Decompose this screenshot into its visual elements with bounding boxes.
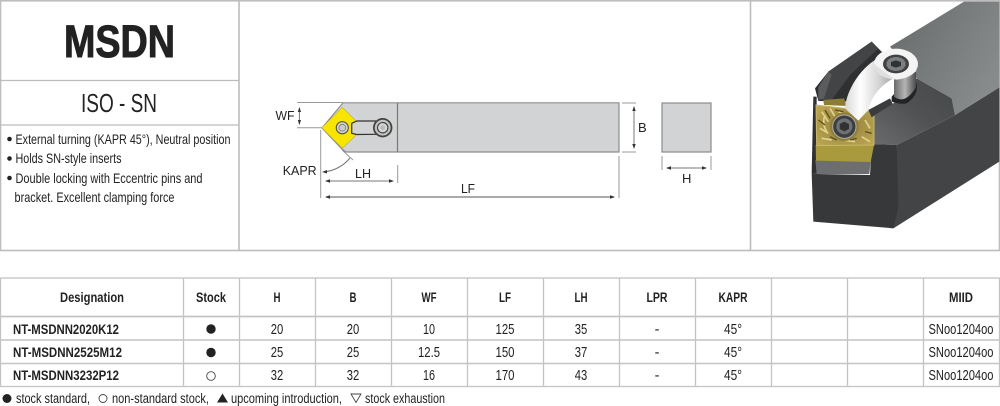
legend: non-standard stock, [112,391,209,406]
row 3: - [655,368,660,384]
table header: B [350,290,357,305]
row 2: 12.5 [418,345,440,361]
text block: features: External turning (KAPR 45°), Neutral position [16,131,230,147]
right side face [893,87,999,228]
clamp arm [845,49,918,121]
legend: stock standard, [16,391,90,406]
clamp post base [892,80,917,104]
dimension labels: H [682,171,691,186]
row 2: 25 [271,345,283,361]
pocket wall [815,42,883,102]
row 1: 20 [271,322,283,338]
table header: LF [499,290,511,305]
row 3 [13,368,994,384]
insert [322,107,357,148]
shank top face [890,2,999,115]
front face [812,144,898,228]
row 1: 35 [575,322,587,338]
row 2: 37 [575,345,587,361]
row 3: 32 [347,368,359,384]
row 1: NT-MSDNN2020K12 [13,322,119,337]
insert screw [336,122,348,134]
table header: H [274,290,280,305]
text block: features: Double locking with Eccentric pins and [16,170,202,186]
legend [2,391,445,406]
table header [60,290,973,305]
head top face [870,78,955,145]
row 1: 20 [347,322,359,338]
row 2: NT-MSDNN2525M12 [13,345,122,360]
row 2: 45° [724,345,742,361]
table grid [0,278,1000,386]
3D tool illustration [812,2,999,228]
insert side [816,145,874,162]
table header: KAPR [718,290,748,305]
row 2 [13,345,994,361]
holder body [322,103,619,152]
insert screw [830,112,859,141]
row 1: 10 [423,322,435,338]
clamp slot shadow [868,98,893,117]
subtitle: ISO - SN [81,88,157,118]
row 3: 170 [496,368,514,384]
text block: features: Holds SN-style inserts [16,150,122,166]
table header: Stock [196,290,226,305]
row 3: 16 [423,368,435,384]
dimension labels [276,108,691,196]
row 2: - [655,345,660,361]
dimension labels: WF [276,108,295,123]
row 3: 43 [575,368,587,384]
text block: features: bracket. Excellent clamping force [14,189,175,205]
row 1: 125 [496,322,514,338]
row 3: 45° [724,368,742,384]
insert top [816,105,874,146]
row 1: - [655,322,660,338]
dimension labels: KAPR [283,163,317,178]
table header: LH [574,290,588,305]
dimension labels: B [638,120,647,135]
dimension lines [297,102,711,198]
row 3: NT-MSDNN3232P12 [13,368,119,383]
table header: LPR [646,290,668,305]
clamp [352,119,392,136]
table header: MIID [949,290,973,305]
panel: frame [0,0,1000,250]
table header: Designation [60,290,124,305]
row 1: 45° [724,322,742,338]
seat [815,160,871,174]
title: MSDN [64,16,175,67]
row 1 [13,322,994,338]
text block: features [7,131,231,205]
dimension labels: LH [355,166,371,181]
legend: upcoming introduction, [231,391,342,406]
legend: stock exhaustion [365,391,445,406]
table [0,278,1000,386]
table header: WF [422,290,436,305]
technical drawing [276,102,711,199]
clamp post [894,67,916,99]
cross-section [662,103,711,152]
dimension labels: LF [461,181,475,196]
row 3: 32 [271,368,283,384]
row 2: 150 [496,345,514,361]
row 2: 25 [347,345,359,361]
